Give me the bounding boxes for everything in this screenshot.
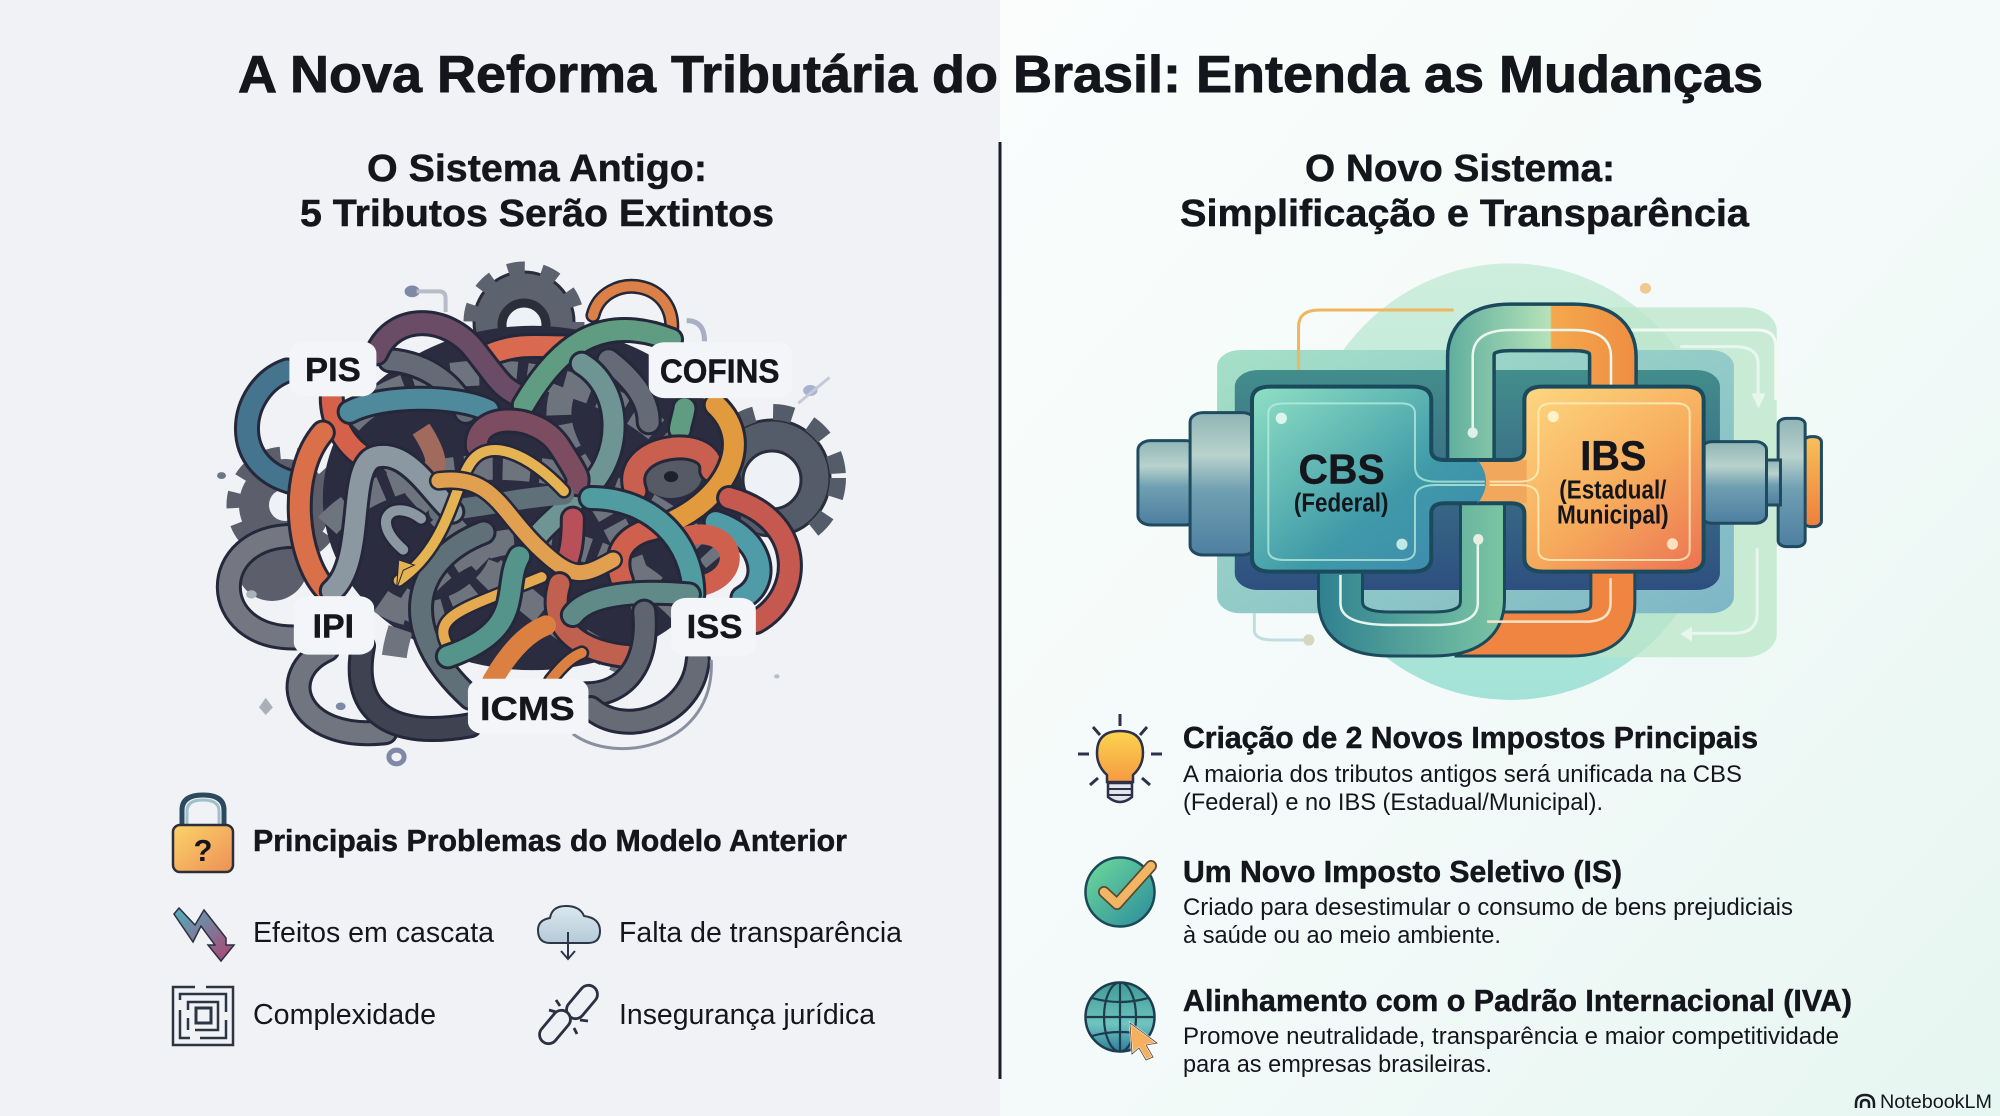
item title: new taxes: Criação de 2 Novos Impostos Principais xyxy=(1183,720,1758,755)
box: IBS: IBS xyxy=(1580,432,1646,479)
bottom pipes xyxy=(1340,503,1613,634)
label: cascade: Efeitos em cascata xyxy=(253,917,495,949)
label: ICMS: ICMS xyxy=(480,691,575,728)
label: IPI xyxy=(294,596,374,655)
top pipe xyxy=(1468,327,1613,463)
illustration: tangled taxes xyxy=(217,268,838,764)
tangle core xyxy=(323,326,742,670)
illustration: CBS and IBS pipes xyxy=(1138,263,1821,700)
connector lines xyxy=(1254,310,1776,646)
item text: international standard xyxy=(1183,1023,1839,1078)
item text: new taxes xyxy=(1183,761,1742,816)
icon: maze xyxy=(173,987,233,1045)
heading: new system xyxy=(1180,148,1750,235)
center divider xyxy=(998,142,1002,1079)
item text: new taxes: A maioria dos tributos antigos será unificada na CBS xyxy=(1183,761,1742,788)
item text: international standard: para as empresas brasileiras. xyxy=(1183,1051,1492,1078)
heading: new system: O Novo Sistema: xyxy=(1305,148,1615,190)
box: CBS xyxy=(1252,387,1486,572)
box: IBS: Municipal) xyxy=(1557,499,1669,529)
icon: light bulb xyxy=(1078,714,1162,802)
box: IBS xyxy=(1473,387,1704,572)
problem: legal uncertainty xyxy=(536,982,876,1047)
box: CBS: (Federal) xyxy=(1294,488,1388,517)
title: A Nova Reforma Tributária do Brasil: Entenda as Mudanças xyxy=(238,46,1763,104)
heading: old system: O Sistema Antigo: xyxy=(367,148,707,190)
ropes xyxy=(229,286,790,749)
icon: cascade arrow xyxy=(174,908,234,961)
label: IPI: IPI xyxy=(313,608,354,645)
heading: old system xyxy=(300,148,774,235)
label: ISS xyxy=(671,598,756,656)
label: complexity: Complexidade xyxy=(253,999,436,1031)
background: right panel xyxy=(1000,0,2000,1116)
label: ICMS xyxy=(468,679,588,734)
gears xyxy=(233,268,838,601)
left cylinders xyxy=(1138,413,1255,555)
label: COFINS xyxy=(649,342,792,398)
item: selective tax xyxy=(1086,854,1793,949)
problem: transparency xyxy=(538,906,903,959)
item text: selective tax xyxy=(1183,894,1793,949)
box: IBS: (Estadual/ xyxy=(1559,474,1667,504)
heading: new system: Simplificação e Transparência xyxy=(1180,193,1750,235)
panel: new system xyxy=(1078,148,1852,1078)
problems heading: Principais Problemas do Modelo Anterior xyxy=(253,823,847,858)
icon: padlock: ? xyxy=(194,833,212,868)
item: international standard xyxy=(1086,982,1852,1078)
label: ISS: ISS xyxy=(687,609,742,646)
icon: padlock xyxy=(173,795,233,872)
label: legal uncertainty: Insegurança jurídica xyxy=(619,999,876,1031)
icon: check mark xyxy=(1086,858,1154,926)
decorative dots xyxy=(217,285,830,764)
item: new taxes xyxy=(1078,714,1758,816)
background: left panel xyxy=(0,0,1000,1116)
item text: new taxes: (Federal) e no IBS (Estadual/Municipal). xyxy=(1183,789,1603,816)
item text: international standard: Promove neutralidade, transparência e maior competitividade xyxy=(1183,1023,1839,1050)
item title: selective tax: Um Novo Imposto Seletivo (IS) xyxy=(1183,854,1622,889)
problem: cascade xyxy=(174,908,495,961)
panel: old system xyxy=(173,148,903,1047)
label: PIS xyxy=(289,341,376,396)
label: COFINS: COFINS xyxy=(660,353,780,390)
item text: selective tax: à saúde ou ao meio ambiente. xyxy=(1183,922,1501,949)
heading: old system: 5 Tributos Serão Extintos xyxy=(300,193,774,235)
item text: selective tax: Criado para desestimular o consumo de bens prejudiciais xyxy=(1183,894,1793,921)
icon: broken link xyxy=(536,982,601,1047)
label: transparency: Falta de transparência xyxy=(619,917,903,949)
icon: globe with cursor xyxy=(1086,982,1157,1060)
problem: complexity xyxy=(173,987,436,1045)
watermark: NotebookLM: NotebookLM xyxy=(1880,1092,1992,1113)
label: PIS: PIS xyxy=(305,352,361,389)
right cylinders xyxy=(1701,418,1821,547)
icon: cloud xyxy=(538,906,600,959)
box: CBS: CBS xyxy=(1299,445,1385,492)
item title: international standard: Alinhamento com o Padrão Internacional (IVA) xyxy=(1183,983,1852,1018)
